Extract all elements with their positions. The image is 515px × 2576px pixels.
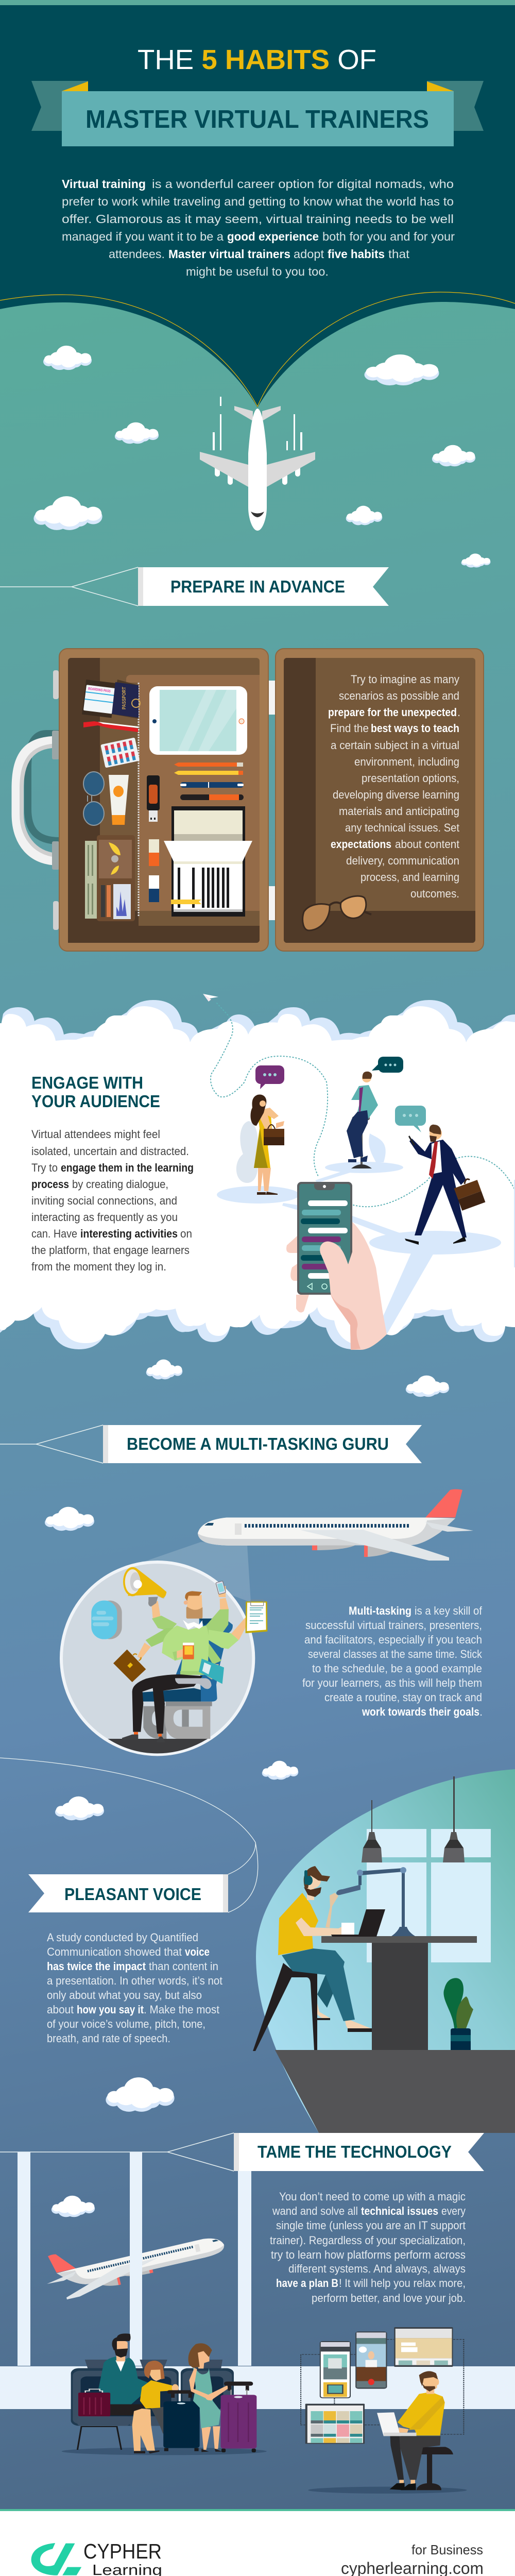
- heading: engage: [31, 1073, 160, 1111]
- ribbon heading: MASTER VIRTUAL TRAINERS: [85, 106, 429, 133]
- phone held up: [216, 1581, 226, 1595]
- notebook with barcode: [164, 806, 252, 917]
- hinges: [267, 681, 277, 920]
- beam from plane to window: [143, 1542, 251, 1602]
- intro paragraph: five habits: [328, 247, 385, 261]
- tame text: perform better, and love your job.: [312, 2292, 466, 2304]
- intro paragraph: that: [388, 247, 410, 261]
- pleasant voice text: about: [47, 2003, 74, 2016]
- suitcase illustration: [18, 649, 484, 951]
- speech bubble light teal: [395, 1106, 426, 1132]
- top accent strip: [0, 0, 515, 5]
- intro paragraph: is a wonderful career option for digital nomads, who: [152, 177, 454, 191]
- pencils and pens: [174, 762, 244, 800]
- intro paragraph: offer. Glamorous as it may seem, virtual training needs to be well: [62, 212, 454, 226]
- multi-tasking text: successful virtual trainers, presenters,: [305, 1619, 482, 1632]
- pleasant voice text: of your voice’s volume, pitch, tone,: [47, 2018, 205, 2030]
- prepare text: prepare for the unexpected: [328, 706, 457, 719]
- intro paragraph: [62, 177, 455, 278]
- wallet and cash: [85, 835, 135, 921]
- tame text: [270, 2190, 466, 2304]
- person: woman on phone: [250, 1095, 284, 1195]
- pleasant voice text: than content in: [149, 1960, 218, 1973]
- pleasant voice text: [47, 1931, 222, 2045]
- prepare text: environment, including: [354, 755, 459, 768]
- tame text: single time (unless you are an IT support: [276, 2219, 466, 2232]
- intro paragraph: good experience: [227, 230, 319, 243]
- heading: engage: YOUR AUDIENCE: [31, 1092, 160, 1111]
- trainer with connected screens: [301, 2327, 467, 2494]
- engage text: interacting as frequently as you: [31, 1211, 178, 1224]
- intro paragraph: Master virtual trainers: [168, 247, 290, 261]
- tame text: ! It will help you relax more,: [339, 2277, 466, 2290]
- tame text: different systems. And always, always: [288, 2262, 466, 2275]
- boarding pass: [82, 680, 116, 718]
- terminal window frame: [0, 2152, 515, 2409]
- clipboard: [246, 1600, 267, 1633]
- tablet screen one: [394, 2327, 453, 2367]
- prepare text: materials and anticipating: [339, 805, 459, 818]
- family waiting with luggage: [62, 2333, 267, 2455]
- multi-tasking text: and facilitators, especially if you teach: [304, 1633, 482, 1646]
- speech bubble purple: [255, 1065, 284, 1089]
- intro paragraph: both for you and for your: [322, 230, 455, 243]
- pleasant voice text: A study conducted by Quantified: [47, 1931, 198, 1944]
- person: man on stool: [347, 1072, 386, 1168]
- banner: become a multi-tasking guru: [0, 1425, 422, 1463]
- prepare text: about content: [395, 838, 459, 851]
- passport: [112, 680, 140, 719]
- intro paragraph: prefer to work while traveling and getting to know what the world has to: [62, 195, 454, 208]
- hand fingers: [286, 1236, 309, 1313]
- purple suitcase: [220, 2382, 256, 2452]
- pleasant voice text: breath, and rate of speech.: [47, 2032, 170, 2045]
- prepare text: presentation options,: [362, 772, 459, 785]
- footer white panel: [0, 2511, 515, 2576]
- person: businessman walking: [405, 1125, 485, 1245]
- multi-tasking text: several classes at the same time. Stick: [308, 1648, 483, 1660]
- pleasant voice text: how you say it: [77, 2003, 144, 2016]
- header dark panel with curved sky cut-out: [0, 5, 515, 408]
- prepare text: Try to imagine as many: [351, 673, 459, 686]
- suitcase handle: [18, 670, 59, 930]
- pleasant voice text: . Make the most: [144, 2003, 219, 2016]
- multi-tasking text: is a key skill of: [415, 1604, 483, 1617]
- engage text: the platform, that engage learners: [31, 1244, 190, 1257]
- tablet screen two: [305, 2404, 365, 2444]
- megaphone: [123, 1567, 166, 1606]
- prepare text: any technical issues. Set: [345, 821, 459, 834]
- sunglasses blue: [83, 772, 104, 825]
- logo: cypher learning: [31, 2539, 162, 2576]
- floor shadow: [62, 2448, 267, 2455]
- engage text: isolated, uncertain and distracted.: [31, 1145, 189, 1158]
- engage text: process: [31, 1178, 69, 1191]
- engage text: on: [180, 1227, 192, 1240]
- laptop: [331, 1909, 385, 1937]
- prepare text: developing diverse learning: [333, 788, 459, 801]
- banner: pleasant voice: [28, 1874, 228, 1912]
- intro paragraph: might be useful to you too.: [186, 265, 329, 278]
- multi-tasking text: for your learners, as this will help them: [302, 1676, 482, 1689]
- engage text: from the moment they log in.: [31, 1260, 166, 1273]
- dashed connectors between screens: [301, 2340, 464, 2434]
- tame text: every: [441, 2205, 466, 2217]
- toothbrush: [83, 721, 138, 732]
- plant: [443, 1978, 473, 2050]
- multi-tasking text: [302, 1604, 483, 1718]
- right case half: [276, 649, 484, 951]
- title: THE 5 HABITS OF: [138, 44, 376, 75]
- mother: [188, 2343, 228, 2452]
- person: multi-armed traveler: [122, 1586, 249, 1742]
- multi-tasking text: Multi-tasking: [349, 1604, 411, 1617]
- pill blister: [100, 737, 140, 768]
- for business: [341, 2542, 484, 2576]
- tame text: have a plan B: [276, 2277, 338, 2290]
- pleasant voice text: a presentation. In other words, it’s not: [47, 1974, 222, 1987]
- prepare text: a certain subject in a virtual: [331, 739, 459, 752]
- studio room scene: [253, 1769, 515, 2133]
- banner: prepare in advance: PREPARE IN ADVANCE: [170, 577, 345, 596]
- pendant lamps: [362, 1776, 465, 1862]
- cloud outside terminal: [52, 2196, 95, 2217]
- windows: [367, 1829, 491, 1962]
- prepare text: expectations: [331, 838, 391, 851]
- intro paragraph: adopt: [294, 247, 324, 261]
- phone screen two: [355, 2331, 387, 2389]
- tablet: [149, 686, 247, 755]
- person: trainer: [308, 2371, 467, 2494]
- banner: tame the technology: [0, 2133, 484, 2171]
- circular cabin window scene: [61, 1562, 267, 1754]
- banner: tame the technology: TAME THE TECHNOLOGY: [258, 2142, 452, 2161]
- engage text: [31, 1128, 194, 1273]
- navy suitcase: [163, 2390, 200, 2451]
- prepare text: .: [457, 706, 460, 719]
- icon: airplane top view: [200, 397, 315, 531]
- tame text: try to learn how platforms perform across: [271, 2248, 466, 2261]
- brown sunglasses: [303, 896, 371, 930]
- father: [98, 2333, 150, 2415]
- passport: PASSPORT: [122, 687, 127, 709]
- clouds: top sky: [33, 346, 490, 568]
- cabin porthole: [91, 1601, 122, 1639]
- tame text: wand and solve all: [272, 2205, 358, 2217]
- engage text: by creating dialogue,: [72, 1178, 168, 1191]
- banner: pleasant voice: PLEASANT VOICE: [64, 1885, 201, 1904]
- tame text: trainer). Regardless of your specialization,: [270, 2234, 466, 2247]
- engage text: interesting activities: [80, 1227, 178, 1240]
- for business: for Business: [411, 2542, 483, 2557]
- child: [132, 2361, 179, 2453]
- paper plane: [203, 994, 218, 1002]
- prepare text: scenarios as possible and: [339, 689, 459, 702]
- airplane seat: [141, 1619, 233, 1739]
- left case half: [59, 649, 268, 951]
- erasers: [149, 839, 159, 902]
- sunscreen tube: [109, 775, 129, 825]
- multi-tasking text: create a routine, stay on track and: [324, 1691, 482, 1704]
- pleasant voice text: only about what you say, but also: [47, 1989, 202, 2002]
- briefcase brown: [113, 1650, 146, 1682]
- banner: prepare in advance: [0, 567, 389, 606]
- ribbon: [31, 81, 484, 146]
- hand: [320, 1222, 387, 1350]
- plant behind woman: [236, 1121, 258, 1183]
- prepare text: process, and learning: [360, 871, 459, 884]
- phone: [297, 1182, 352, 1295]
- intro paragraph: attendees.: [109, 247, 165, 261]
- red bag: [78, 2389, 110, 2416]
- prepare text: best ways to teach: [371, 722, 459, 735]
- banner: become a multi-tasking guru: BECOME A MULTI-TASKING GURU: [127, 1434, 389, 1453]
- pleasant voice text: voice: [185, 1945, 210, 1958]
- prepare text: delivery, communication: [346, 854, 459, 867]
- desk: [321, 1936, 477, 2050]
- tame text: technical issues: [361, 2205, 438, 2217]
- prepare text: outcomes.: [410, 887, 459, 900]
- usb drive: [147, 775, 160, 822]
- microphone arm: [336, 1867, 415, 1936]
- pleasant voice text: has twice the impact: [47, 1960, 146, 1973]
- engage text: Virtual attendees might feel: [31, 1128, 160, 1141]
- intro paragraph: managed if you want it to be a: [62, 230, 224, 243]
- logo: cypher learning: CYPHER: [83, 2539, 162, 2563]
- room background: [256, 1769, 515, 2133]
- dotted flight paths: [211, 1003, 515, 1207]
- multi-tasking text: work towards their goals: [362, 1705, 479, 1718]
- phone screen one: [320, 2341, 351, 2398]
- multi-tasking text: to the schedule, be a good example: [312, 1662, 482, 1675]
- engage text: can. Have: [31, 1227, 77, 1240]
- footer accent line: [0, 2509, 515, 2511]
- boarding pass: BOARDING PASS: [88, 687, 111, 693]
- waiting chairs: [71, 2360, 234, 2450]
- tame text: You don’t need to come up with a magic: [279, 2190, 466, 2203]
- airplane taking off: [41, 2216, 228, 2303]
- airplane side view: [198, 1489, 473, 1561]
- teal book: [199, 1658, 224, 1684]
- prepare text: Find the: [330, 722, 369, 735]
- gold curve lines: [0, 292, 515, 406]
- prepare text: [328, 673, 460, 900]
- platforms and connectors: [217, 1162, 515, 1334]
- intro paragraph: Virtual training: [62, 177, 146, 191]
- rope curve to pleasant voice banner: [0, 1758, 258, 1912]
- clouds: middle sky: [45, 1360, 449, 2112]
- engage text: Try to: [31, 1161, 58, 1174]
- cloud panel: engage section: [0, 1000, 515, 1349]
- engage text: inviting social connections, and: [31, 1194, 177, 1207]
- pleasant voice text: Communication showed that: [47, 1945, 182, 1958]
- person: podcaster: [253, 1866, 372, 2051]
- heading: engage: ENGAGE WITH: [31, 1073, 143, 1092]
- floor: [275, 2050, 515, 2133]
- engage text: engage them in the learning: [61, 1161, 194, 1174]
- speech bubble dark teal: [372, 1057, 403, 1073]
- multi-tasking text: .: [479, 1705, 483, 1718]
